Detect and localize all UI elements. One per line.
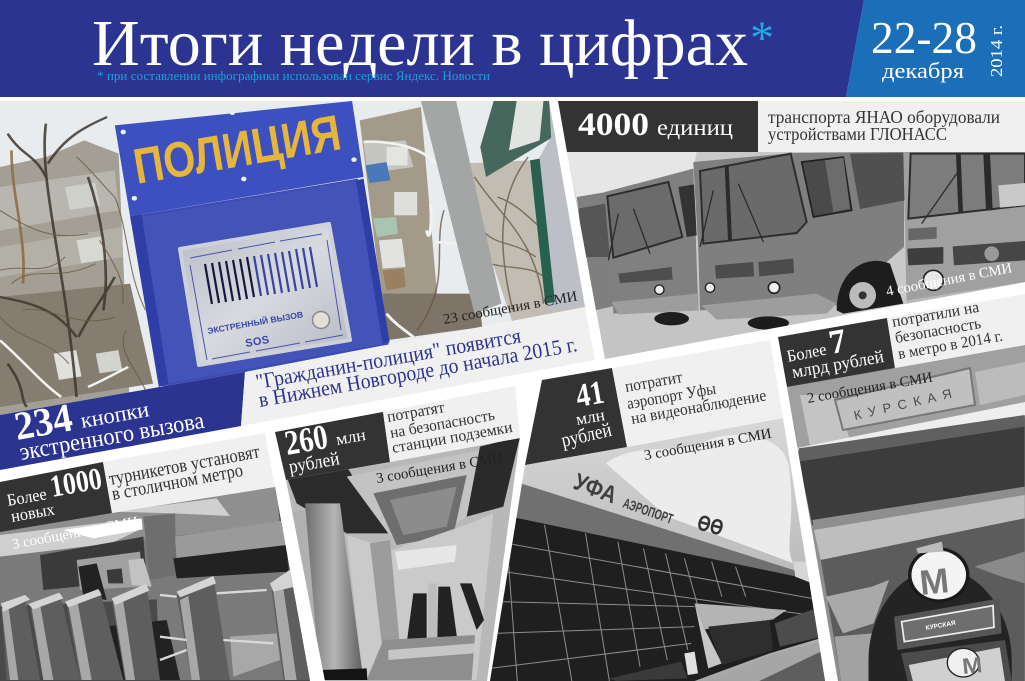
gray caption box xyxy=(758,101,1025,152)
header banner xyxy=(0,0,1025,97)
photo: turnstiles xyxy=(0,480,320,681)
stat 7 billion xyxy=(785,322,886,382)
caption xyxy=(386,399,514,457)
stat 41: рублей xyxy=(559,419,614,452)
photo: Kurskaya station: М xyxy=(961,652,983,679)
caption: транспорта ЯНАО оборудовали xyxy=(768,107,1000,127)
sign body xyxy=(130,179,394,397)
stat 41: 41 xyxy=(573,375,607,415)
photo: airport: ӨӨ xyxy=(695,510,726,541)
panel: turnstiles xyxy=(0,433,320,681)
stat 7 billion: 7 xyxy=(826,322,849,362)
stat 4000: единиц xyxy=(657,115,733,140)
photo: Kurskaya station xyxy=(785,340,1025,681)
dark stat box xyxy=(778,318,895,387)
panel: metro security xyxy=(778,294,1025,681)
footnote: * при составлении инфографики использован сервис Яндекс. Новости xyxy=(97,69,490,83)
gray caption box xyxy=(887,294,1025,368)
steel call plate: ЭКСТРЕННЫЙ ВЫЗОВ xyxy=(206,308,304,336)
caption: на видеонаблюдение xyxy=(629,385,768,428)
dark stat box xyxy=(275,412,390,480)
photo: police call box xyxy=(0,101,600,421)
stat 260: млн xyxy=(334,425,367,449)
stat 234: экстренного вызова xyxy=(18,408,207,466)
stat 260: рублей xyxy=(287,448,341,478)
steel call plate xyxy=(180,224,350,365)
media count: 2 сообщения в СМИ xyxy=(806,369,934,407)
caption xyxy=(768,107,1000,144)
caption xyxy=(891,299,1004,363)
photo: Kurskaya station: КУРСКАЯ xyxy=(925,620,957,632)
second bus xyxy=(605,169,698,314)
photo: Kurskaya station: М xyxy=(918,561,951,603)
caption: потратит xyxy=(623,367,684,396)
caption: турникетов установят xyxy=(107,441,262,490)
photo: Kurskaya station: КУРСКАЯ xyxy=(852,386,953,423)
near bus xyxy=(903,152,1025,305)
caption xyxy=(623,367,768,428)
stat 260 xyxy=(282,417,367,478)
caption: в метро в 2014 г. xyxy=(897,328,1004,363)
gray caption box xyxy=(103,433,275,513)
caption panel xyxy=(241,307,595,426)
dark stat box xyxy=(558,101,758,152)
photo: underground station xyxy=(280,435,525,681)
stat 1000: новых xyxy=(9,500,57,526)
dark blue stat band xyxy=(0,372,245,470)
panel: Ufa airport xyxy=(488,340,831,681)
caption: потратили на xyxy=(891,299,980,331)
photo: airport: АЭРОПОРТ xyxy=(621,495,676,527)
media count: 4 сообщения в СМИ xyxy=(885,260,1014,300)
caption: на безопасность xyxy=(389,407,496,442)
date range: 22-28 xyxy=(871,12,977,63)
stat 7 billion: млрд рублей xyxy=(790,346,886,382)
title asterisk: * xyxy=(750,12,774,65)
far bus xyxy=(577,192,617,310)
stat 1000: Более xyxy=(5,484,48,510)
stat 41: млн xyxy=(574,405,606,429)
stat 4000: 4000 xyxy=(578,107,649,143)
stat 260: 260 xyxy=(282,417,331,463)
stat 234: 234 xyxy=(11,394,76,449)
sign head xyxy=(115,101,364,216)
title: Итоги недели в цифрах xyxy=(92,7,748,80)
caption: безопасность xyxy=(894,315,982,347)
media count: 3 сообщения в СМИ xyxy=(643,426,773,464)
caption: в столичном метро xyxy=(110,460,245,505)
panel: police emergency buttons xyxy=(0,101,600,470)
stat 234: кнопки xyxy=(79,396,151,433)
year: 2014 г. xyxy=(987,25,1006,77)
panel: buses GLONASS xyxy=(558,101,1025,365)
dark stat box xyxy=(525,368,627,465)
stat 41 xyxy=(559,375,614,452)
photo: buses xyxy=(560,150,1025,365)
stat 4000 xyxy=(578,107,733,143)
caption: устройствами ГЛОНАСС xyxy=(768,124,947,144)
gray caption box xyxy=(383,386,520,462)
photo: airport: УФА xyxy=(570,468,621,509)
steel call plate: SOS xyxy=(244,334,270,350)
caption: станции подземки xyxy=(391,419,514,457)
stat 1000: 1000 xyxy=(47,460,104,504)
media count: 3 сообщения в СМИ xyxy=(11,514,140,553)
third bus xyxy=(693,152,904,310)
dark stat box xyxy=(0,462,112,532)
photo: airport xyxy=(488,415,831,681)
caption panel: "Гражданин-полиция" появится xyxy=(254,324,523,394)
panel: station security xyxy=(275,386,525,681)
stat 1000 xyxy=(5,460,104,526)
media count: 23 сообщения в СМИ xyxy=(442,288,579,328)
caption: потратят xyxy=(386,399,446,426)
month: декабря xyxy=(882,58,964,83)
stat 7 billion: Более xyxy=(785,340,828,366)
media count: 3 сообщения в СМИ xyxy=(375,450,504,487)
gray caption box xyxy=(612,340,783,447)
caption: аэропорт Уфы xyxy=(625,379,717,413)
caption panel: в Нижнем Новгороде до начала 2015 г. xyxy=(257,332,579,412)
sign lettering: ПОЛИЦИЯ xyxy=(129,104,345,195)
